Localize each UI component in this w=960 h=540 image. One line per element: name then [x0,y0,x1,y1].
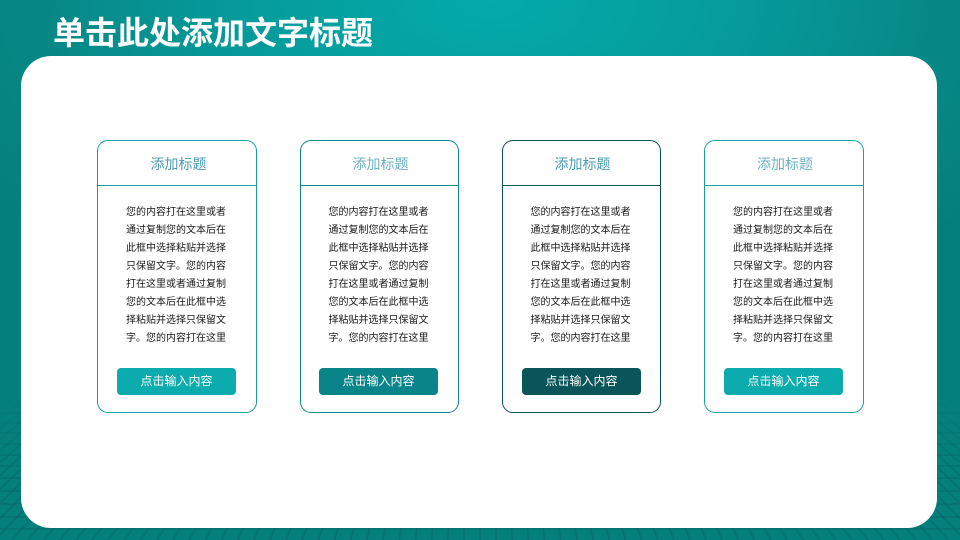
card 4 body text: 此框中选择粘贴并选择 [733,243,833,254]
card 4 button [724,368,843,395]
card 4 button: 点击输入内容 [747,374,820,388]
card 1 button [117,368,236,395]
card 2 body text: 只保留文字。您的内容 [328,261,428,272]
card 3 body text: 字。您的内容打在这里 [530,333,630,344]
card 4 [704,140,864,413]
card 3 body text: 只保留文字。您的内容 [530,261,630,272]
card 2 body text [328,206,428,344]
card 2 [300,140,459,413]
card 1 body text: 字。您的内容打在这里 [126,333,226,344]
card 3 body text: 通过复制您的文本后在 [530,225,630,236]
card 2 body text: 字。您的内容打在这里 [328,333,428,344]
card 4 body text: 打在这里或者通过复制 [733,279,833,290]
card 3 body text: 择粘贴并选择只保留文 [530,315,630,326]
card 4 heading: 添加标题 [757,156,813,172]
card 4 body text [733,206,833,344]
card 3 [502,140,661,413]
card 2 button: 点击输入内容 [342,374,414,388]
card 2 body text: 通过复制您的文本后在 [328,225,428,236]
card 1 [97,140,257,413]
card 1 button: 点击输入内容 [140,374,212,388]
card 3 button [522,368,641,395]
card 2 body text: 您的文本后在此框中选 [328,297,428,308]
card 1 body text: 您的内容打在这里或者 [126,207,226,218]
background grid pattern [0,422,960,540]
card 2 body text: 您的内容打在这里或者 [328,207,428,218]
card 1 body text: 打在这里或者通过复制 [126,279,226,290]
card 1 body text: 此框中选择粘贴并选择 [126,243,226,254]
card 2 body text: 打在这里或者通过复制 [328,279,428,290]
title: 单击此处添加文字标题 [53,15,373,51]
card 2 button [319,368,438,395]
card 4 body text: 您的文本后在此框中选 [733,297,833,308]
card 3 body text [530,206,630,344]
card 2 heading: 添加标题 [352,156,408,172]
card 2 body text: 此框中选择粘贴并选择 [328,243,428,254]
card 4 body text: 只保留文字。您的内容 [733,261,833,272]
card 3 button: 点击输入内容 [545,374,618,388]
card 3 body text: 您的文本后在此框中选 [530,297,630,308]
card 4 body text: 通过复制您的文本后在 [733,225,833,236]
card 1 body text: 择粘贴并选择只保留文 [126,315,226,326]
card 1 heading: 添加标题 [150,156,206,172]
card 1 body text [126,206,226,344]
card 3 body text: 您的内容打在这里或者 [530,207,630,218]
card 3 body text: 此框中选择粘贴并选择 [530,243,630,254]
card 4 body text: 择粘贴并选择只保留文 [733,315,833,326]
card 1 body text: 您的文本后在此框中选 [126,297,226,308]
card 4 body text: 您的内容打在这里或者 [733,207,833,218]
card 3 heading: 添加标题 [554,156,610,172]
card 4 body text: 字。您的内容打在这里 [733,333,833,344]
card 3 body text: 打在这里或者通过复制 [530,279,630,290]
card 1 body text: 通过复制您的文本后在 [126,225,226,236]
card 2 body text: 择粘贴并选择只保留文 [328,315,428,326]
card 1 body text: 只保留文字。您的内容 [126,261,226,272]
